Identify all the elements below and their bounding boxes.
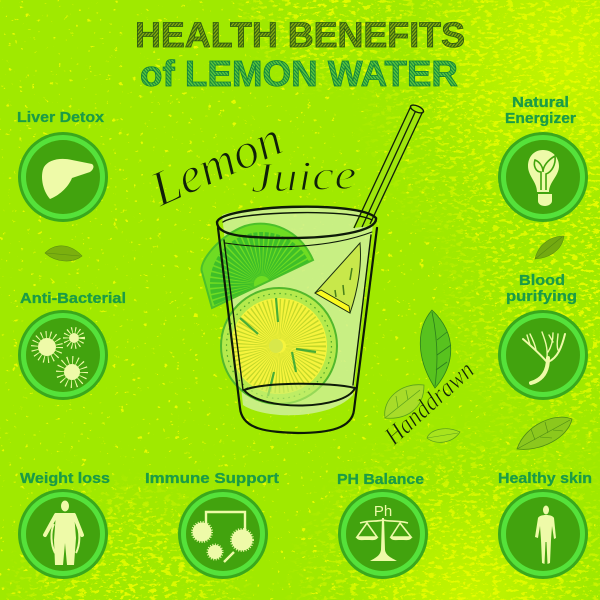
light leaf [385,385,424,418]
icon: human figure [535,506,556,564]
lemon juice glass illustration [202,103,425,433]
large green leaf [420,310,451,388]
badge [18,132,108,222]
label: PH Balance [337,472,424,488]
icon: scales: Ph [374,503,392,520]
label: Blood [519,273,565,289]
benefit: PH Balance [337,472,428,579]
label: Natural [512,95,569,111]
badge [18,310,108,400]
script label: Juice: Juice [250,152,357,202]
glass outline [217,207,377,433]
benefit: Immune Support [145,471,279,579]
badge [18,489,108,579]
label: Healthy skin [498,471,592,487]
icon: immune cells diagram [192,512,253,562]
benefit: Weight loss [18,471,110,579]
badge [498,132,588,222]
straw [353,103,425,228]
decorative leaf right [535,236,564,259]
title [135,16,465,94]
lemon slice [221,288,337,404]
small pale leaf [427,429,460,442]
title line 1: HEALTH BENEFITS [135,16,465,55]
script label: Lemon: Lemon [141,110,291,217]
icon: tree of vessels [523,332,565,383]
benefit: Natural Energizer [498,95,588,222]
script label: Handdrawn: Handdrawn [378,355,480,451]
decorative leaf lower right [517,417,572,449]
benefit: Anti-Bacterial [18,291,126,400]
icon: liver [42,159,93,199]
label: Anti-Bacterial [20,291,126,307]
benefit: Liver Detox [17,110,108,222]
title line 2: of LEMON WATER [140,53,458,94]
label: Immune Support [145,471,279,487]
label line 2: Energizer [505,111,576,127]
label: Weight loss [20,471,110,487]
lemon wedge [315,243,361,313]
badge [498,310,588,400]
icon: leaf bulb [528,150,559,206]
icon: body silhouettes [45,500,82,565]
label line 2: purifying [506,289,577,305]
decorative leaf left [45,246,82,261]
benefit: Healthy skin [498,471,592,579]
icon: bacteria [34,330,84,384]
badge [178,489,268,579]
benefit: Blood purifying [498,273,588,400]
badge [338,489,428,579]
badge [498,489,588,579]
lime slice behind glass [202,224,313,314]
water fill [222,208,374,415]
label: Liver Detox [17,110,104,126]
